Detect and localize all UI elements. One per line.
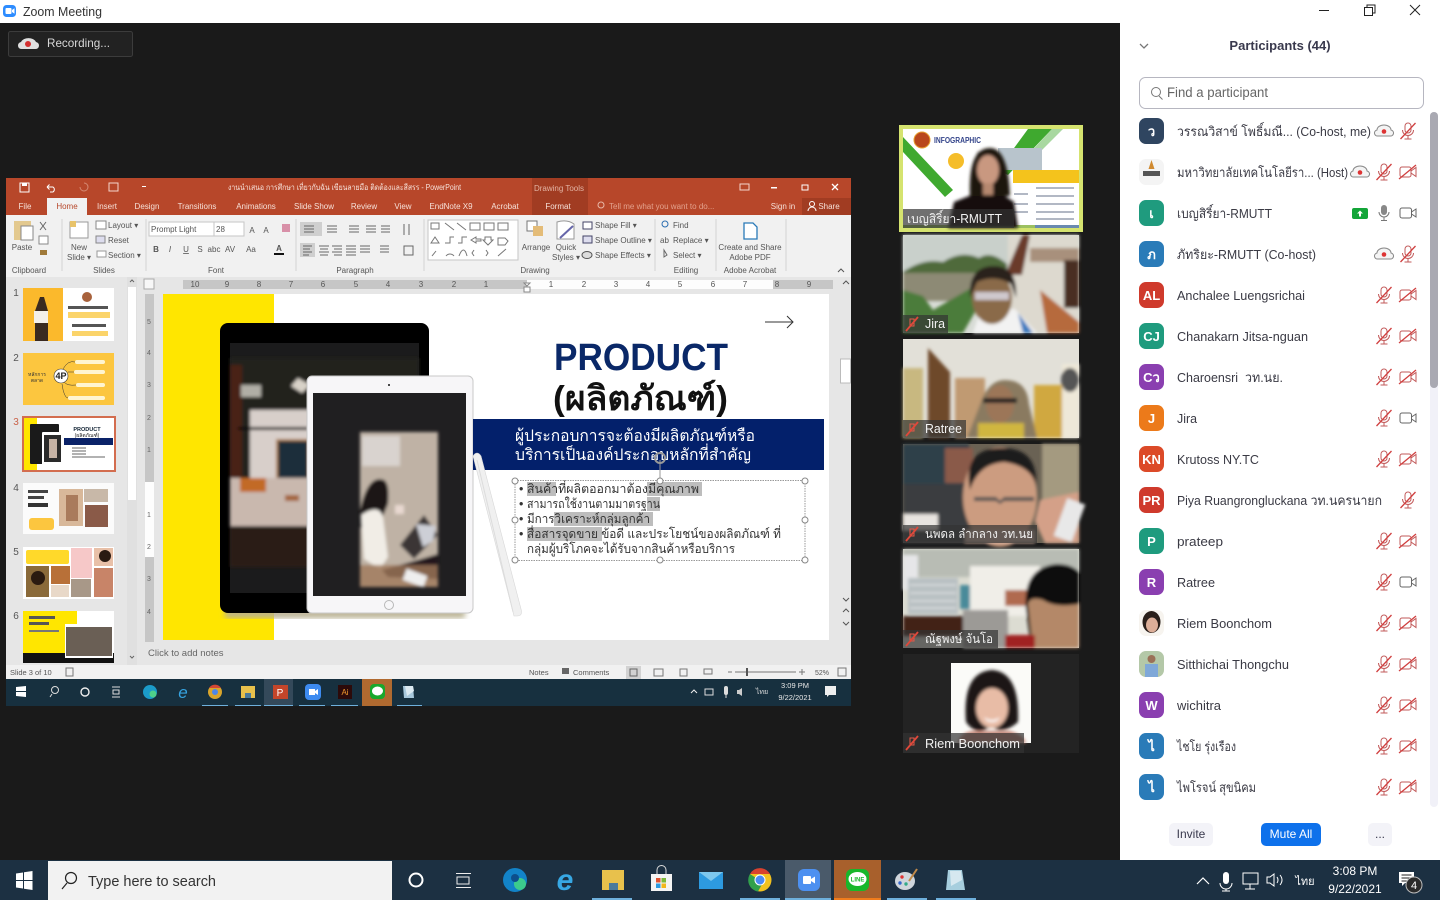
font group: Font [208,266,225,275]
thumbnail 4 [13,483,114,534]
row: Piya [1139,487,1416,513]
horizontal ruler: 5 [354,280,359,289]
icon: paint [895,869,917,890]
navy banner [473,419,824,470]
thumbnail 6: 6 [13,611,19,622]
horizontal ruler: 5 [678,280,683,289]
row: วรรณวิสาข์ [1139,118,1416,144]
row: มหาวิทยาลัย [1139,159,1416,185]
icon: black tablet with cafe photo [220,323,465,618]
powerpoint title bar and tabs: Share [818,202,840,211]
slides group: Section ▾ [108,251,141,260]
horizontal ruler: 6 [321,280,326,289]
font group [149,222,290,275]
icon: internet explorer: e [557,864,573,897]
vertical ruler: 4 [147,350,151,357]
vertical ruler [137,293,157,665]
horizontal ruler: 3 [419,280,424,289]
adobe acrobat group: Adobe Acrobat [724,266,777,275]
clipboard group: Clipboard [12,266,46,275]
powerpoint title bar and tabs: Transitions [178,202,216,211]
tile: Jira [903,235,1079,333]
vertical ruler: 3 [147,576,151,583]
drawing group: Styles ▾ [552,253,580,262]
font group: U [183,245,189,254]
thumbnail 2 [13,353,114,405]
thumbnail 1: 1 [13,288,19,299]
tile: ณัฐพงษ์ [903,549,1079,648]
horizontal ruler: 9 [225,280,230,289]
icon: white tablet with woman photo [307,376,473,613]
row: เบญสิริ์ยา: เบญสิริ์ยา-RMUTT [1177,204,1272,221]
powerpoint title bar and tabs: Slide Show [294,202,334,211]
window controls [1319,5,1420,16]
row: Anchalee: AL [1143,288,1160,303]
mute all button [1261,823,1321,846]
row: ไพโรจน์: ไพโรจน์ สุขนิคม [1176,780,1256,796]
icon: edge [503,868,527,892]
row: Jira [1139,405,1416,431]
horizontal ruler: 10 [191,280,200,289]
selected text box with bullets: • [519,482,523,496]
row: prateep [1139,528,1416,554]
thumbnail 6 [13,611,114,663]
horizontal ruler: 9 [807,280,812,289]
yellow band [163,294,274,640]
thumbnail 3 selected: PRODUCT [73,427,101,433]
slides group: New [71,243,87,252]
thumbnail 2: 4P [55,371,67,381]
row: Chanakarn: Chanakarn Jitsa-nguan [1177,329,1308,344]
row: มหาวิทยาลัย: มหาวิทยาลัยเทคโนโลยีรา... (Host) [1177,165,1348,180]
row: Piya: PR [1142,493,1161,508]
tile: ณัฐพงษ์: ณัฐพงษ์ จันโอ [925,631,993,646]
drawing group: Shape Effects ▾ [595,251,651,260]
icon: mail [699,872,723,889]
row: wichitra: wichitra [1176,698,1222,713]
row: เบญสิริ์ยา: เ [1149,206,1154,221]
row: Piya: Piya Ruangrongluckana วท.นครนายก [1177,493,1382,508]
row: Chanakarn [1139,323,1416,349]
thumbnail 4: 4 [13,483,19,494]
row: Charoensri: Charoensri วท.นย. [1177,370,1283,385]
search box [1140,78,1424,108]
font group: A [276,244,282,253]
vertical ruler: 1 [147,447,151,454]
horizontal ruler: 7 [289,280,294,289]
font group: I [169,245,172,254]
icon: stylus pen [473,453,522,616]
shared screen taskbar: P [277,688,284,699]
window title: Zoom Meeting [23,5,102,19]
slides group: Slide ▾ [67,253,91,262]
powerpoint status bar: 52% [815,670,829,677]
font group: A [249,226,255,235]
powerpoint title bar and tabs: Format [545,202,571,211]
row: Ratree: R [1147,575,1157,590]
powerpoint title bar and tabs: Design [135,202,159,211]
row: Krutoss: KN [1142,452,1161,467]
taskbar underlines [592,898,976,900]
drawing group: Shape Fill ▾ [595,221,637,230]
font group: 28 [216,225,225,234]
tile: Riem Boonchom: Riem Boonchom [925,737,1020,751]
system tray [1197,864,1422,896]
powerpoint title bar and tabs: EndNote X9 [429,202,473,211]
icon: zoom logo [3,5,16,17]
drawing group [428,220,652,275]
drawing group: Arrange [522,243,551,252]
icon: task view [456,874,471,888]
icon: zoom active [785,860,831,900]
icon: notepad [946,870,965,890]
search box [48,861,392,900]
shared screen taskbar: Ai [341,688,349,697]
font group: Aa [246,245,256,254]
row: Krutoss: Krutoss NY.TC [1177,452,1259,467]
tile: เบญสิริ์ยา active speaker [899,125,1083,232]
system tray: ไทย [1294,875,1315,888]
scrollbar [1430,112,1438,807]
editing group: ab [660,236,669,245]
thumbnail 3 selected: (ผลิตภัณฑ์) [75,432,100,439]
editing group: Editing [674,266,698,275]
row: Chanakarn: CJ [1143,329,1160,344]
row: Charoensri: Cว [1143,370,1160,385]
drawing group: Quick [556,243,577,252]
powerpoint status bar: Notes [529,668,549,677]
slide thumbnails panel [6,277,137,665]
font group: Prompt Light [151,225,197,234]
panel: participants [1120,0,1440,860]
more button [1368,823,1392,846]
system tray: 3:08 PM [1333,864,1377,878]
icon: cortana [410,874,422,886]
vertical ruler: 2 [147,544,151,551]
thumbnail 3 selected: 3 [13,417,19,428]
horizontal ruler: 1 [549,280,554,289]
row: Jira: J [1148,411,1155,426]
tile: นพดล [903,444,1085,547]
vertical ruler: 2 [147,415,151,422]
paragraph group: Paragraph [336,266,374,275]
shared screen taskbar: 9/22/2021 [778,693,812,702]
row: ไชโย: ไชโย รุ่งเรือง [1176,739,1236,755]
heading: Thai subtitle: (ผลิตภัณฑ์) [553,379,728,418]
shared screen taskbar: e [178,683,188,702]
row: วรรณวิสาข์: ว [1148,124,1155,139]
shared screen taskbar: 3:09 PM [781,681,809,690]
selected text box with bullets [512,453,808,563]
thumbnail 2: 2 [13,353,19,364]
font group: B [153,245,159,254]
windows taskbar [0,860,1440,900]
icon: chevron [1140,44,1148,48]
powerpoint status bar: Slide 3 of 10 [10,668,52,677]
slides group: Layout ▾ [108,221,138,230]
powerpoint title bar and tabs: Sign in [771,202,795,211]
row: Ratree: Ratree [1177,575,1215,590]
horizontal ruler: 7 [743,280,748,289]
icon: file explorer [602,870,624,890]
row: ไพโรจน์ [1139,774,1416,800]
horizontal ruler: 2 [582,280,587,289]
drawing group: Shape Outline ▾ [595,236,652,245]
selected text box with bullets: • [519,497,523,511]
thumbnail 1 [13,288,114,341]
row: Charoensri [1139,364,1416,390]
tile: นพดล: นพดล ลำกลาง วท.นย [925,527,1033,541]
system tray: 9/22/2021 [1328,882,1382,896]
thumbnail 3 selected [13,417,115,471]
thumbnail 5 [13,547,114,599]
slide scrollbar [840,277,851,665]
adobe acrobat group [718,223,782,275]
icon: arrow [765,316,793,328]
shared screen taskbar: ไทย [755,687,768,696]
search box: Type here to search [88,874,216,890]
font group: S [197,245,203,254]
system tray: 4 [1411,880,1417,892]
editing group: Replace ▾ [673,236,709,245]
row: Sitthichai [1139,651,1416,677]
icon: store [651,866,672,891]
thumbnail 5: 5 [13,547,19,558]
powerpoint title bar and tabs: Acrobat [491,202,520,211]
icon: start [16,871,32,890]
row: Krutoss [1139,446,1416,472]
row: prateep: P [1147,534,1156,549]
row: เบญสิริ์ยา [1139,200,1416,226]
horizontal ruler: 6 [711,280,716,289]
search box: Find a participant [1167,85,1268,100]
banner text [515,426,755,464]
notes pane [138,642,851,665]
vertical ruler: 1 [147,512,151,519]
powerpoint status bar: Comments [573,668,610,677]
selected text box with bullets: • [519,512,523,526]
selected text box with bullets: สามารถใช้งานตามมาตรฐาน [527,497,660,511]
editing group: Select ▾ [673,251,701,260]
vertical ruler: 4 [147,609,151,616]
powerpoint status bar [6,665,851,679]
recording indicator [8,32,132,56]
powerpoint title bar and tabs: View [394,202,412,211]
heading: PRODUCT: PRODUCT [554,337,728,379]
invite button [1169,823,1213,846]
row: ไพโรจน์: ไ [1146,779,1155,795]
selected text box with bullets: กลุ่มผู้บริโภคจะได้รับจากสินค้าหรือบริการ [527,541,735,557]
powerpoint title bar and tabs: Review [351,202,377,211]
recording indicator: Recording... [47,36,110,50]
powerpoint title bar and tabs: Home [56,202,78,211]
horizontal ruler: 4 [386,280,391,289]
row: ภัทริยะ: ภัทริยะ-RMUTT (Co-host) [1177,247,1316,262]
slides group: Slides [93,266,115,275]
selected text box with bullets: มีการวิเคราะห์กลุ่มลูกค้า [527,512,650,527]
tile: เบญสิริ์ยา active speaker: INFOGRAPHIC [934,136,981,145]
banner text: ผู้ประกอบการจะต้องมีผลิตภัณฑ์หรือ [515,426,755,446]
slides group [67,221,141,275]
row: Jira: Jira [1177,411,1198,426]
font group: AV [225,245,236,254]
horizontal ruler [6,277,851,293]
row: ภัทริยะ: ภ [1147,247,1156,262]
selected text box with bullets: • [519,527,523,541]
row: Anchalee [1139,282,1416,308]
ribbon [6,215,851,277]
panel: video gallery [899,125,1085,753]
clipboard group [12,221,48,275]
thumbnail 2: หลักการ [28,372,46,378]
icon: chrome [748,868,772,892]
banner text: บริการเป็นองค์ประกอบหลักที่สำคัญ [515,443,751,464]
powerpoint title bar and tabs [6,178,851,215]
participants heading: Participants (44) [1229,38,1331,53]
horizontal ruler: 3 [614,280,619,289]
icon: line active: LINE [851,878,864,884]
powerpoint title bar and tabs: File [19,202,32,211]
font group: A [263,226,269,235]
tile: Jira: Jira [925,317,945,331]
thumbnail 2: ตลาด [31,378,43,384]
tile: Riem Boonchom [903,654,1079,753]
panel: PowerPoint shared window [6,178,851,706]
more button: ... [1375,827,1385,841]
row: wichitra [1139,692,1416,718]
horizontal ruler: 8 [257,280,262,289]
row: Anchalee: Anchalee Luengsrichai [1177,288,1305,303]
horizontal ruler: 2 [452,280,457,289]
row: ภัทริยะ [1139,241,1416,267]
row: prateep: prateep [1177,534,1223,549]
powerpoint title bar and tabs: งานนำเสนอ การศึกษา เที่ยวกับฉัน เขียนลายมือ ติดต้องและสีสรร - PowerPoint [228,181,462,192]
vertical ruler: 3 [147,382,151,389]
adobe acrobat group: Create and Share [718,243,782,252]
font group: abc [208,245,220,254]
paragraph group [300,222,413,275]
row: Sitthichai: Sitthichai Thongchu [1177,657,1289,672]
horizontal ruler: 4 [646,280,651,289]
clipboard group: Paste [12,243,33,252]
tile: เบญสิริ์ยา active speaker: เบญสิริ์ยา-RMUTT [907,209,1002,226]
powerpoint title bar and tabs: Insert [97,202,118,211]
row: wichitra: W [1145,698,1158,713]
tile: Ratree [903,339,1079,438]
row: ไชโย: ไ [1146,738,1155,754]
powerpoint title bar and tabs: Tell me what you want to do... [609,202,714,211]
horizontal ruler: 1 [484,280,489,289]
adobe acrobat group: Adobe PDF [729,253,771,262]
row: Ratree [1139,569,1416,595]
editing group: Find [673,221,689,230]
thumbnail scrollbar [127,277,137,665]
editing group [660,221,709,275]
row: ไชโย [1139,733,1416,759]
invite button: Invite [1177,827,1206,841]
horizontal ruler: 8 [775,280,780,289]
row: Riem Boonchom [1139,610,1416,636]
row: Riem Boonchom: Riem Boonchom [1177,616,1272,631]
icon: line active [834,860,881,900]
notes pane: Click to add notes [148,648,224,659]
vertical ruler: 5 [147,319,151,326]
mute all button: Mute All [1270,827,1312,841]
selected text box with bullets: สินค้าที่ผลิตออกมาต้องมีคุณภาพ [527,480,699,497]
selected text box with bullets: สื่อสารจุดขาย ข้อดี และประโยชน์ของผลิตภัณฑ์ ที่ [527,525,781,542]
zoom title bar [0,0,1440,23]
panel: slide [163,294,829,640]
drawing group: Drawing [520,266,550,275]
powerpoint title bar and tabs: Drawing Tools [534,184,584,193]
shared screen taskbar [6,679,851,706]
powerpoint title bar and tabs: Animations [236,202,276,211]
tile: Ratree: Ratree [925,422,962,436]
slides group: Reset [108,236,130,245]
row: วรรณวิสาข์: วรรณวิสาข์ โพธิ์มณี... (Co-host, me) [1177,122,1371,139]
